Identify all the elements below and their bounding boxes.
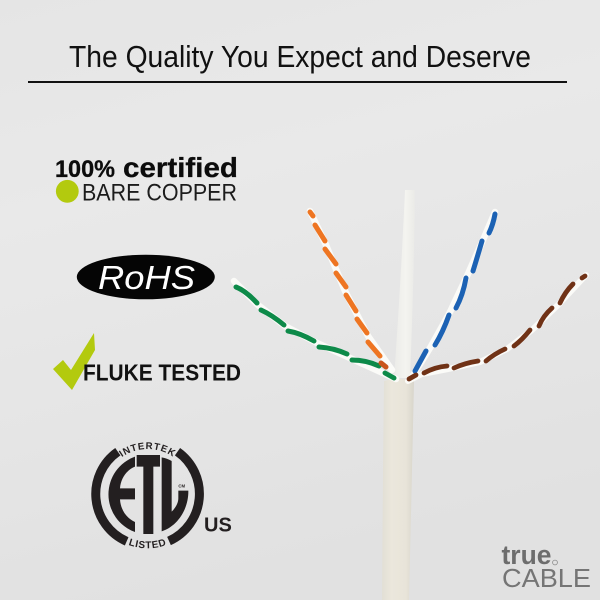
wire pair: brown: [408, 275, 586, 381]
badge: 100% certified bare copper: certified: [123, 152, 238, 183]
badge: ETL listed mark: INTERTEK: [118, 442, 176, 457]
badge: ETL listed mark: CM: [178, 484, 185, 489]
logo: trueCABLE: true: [502, 540, 552, 570]
badge: ETL listed mark: [91, 442, 232, 548]
badge: 100% certified bare copper: [55, 152, 238, 206]
wire pair: blue: [412, 212, 495, 377]
badge: Fluke tested: [53, 333, 241, 390]
logo: trueCABLE: CABLE: [502, 563, 591, 593]
badge: ETL listed mark: US: [204, 514, 232, 536]
wire pair: orange: [310, 211, 392, 370]
badge: RoHS: RoHS: [98, 259, 195, 296]
badge: 100% certified bare copper: 100%: [55, 156, 115, 183]
badge: ETL listed mark: LISTED: [128, 538, 166, 548]
cable jacket: [382, 379, 414, 600]
badge: 100% certified bare copper: BARE COPPER: [82, 180, 237, 206]
rip cord: [394, 190, 415, 378]
logo: trueCABLE: [502, 540, 591, 593]
badge: RoHS: [77, 255, 215, 299]
wire pair: green: [234, 281, 396, 379]
title: The Quality You Expect and Deserve: [69, 39, 531, 74]
badge: Fluke tested: FLUKE TESTED: [83, 360, 241, 386]
